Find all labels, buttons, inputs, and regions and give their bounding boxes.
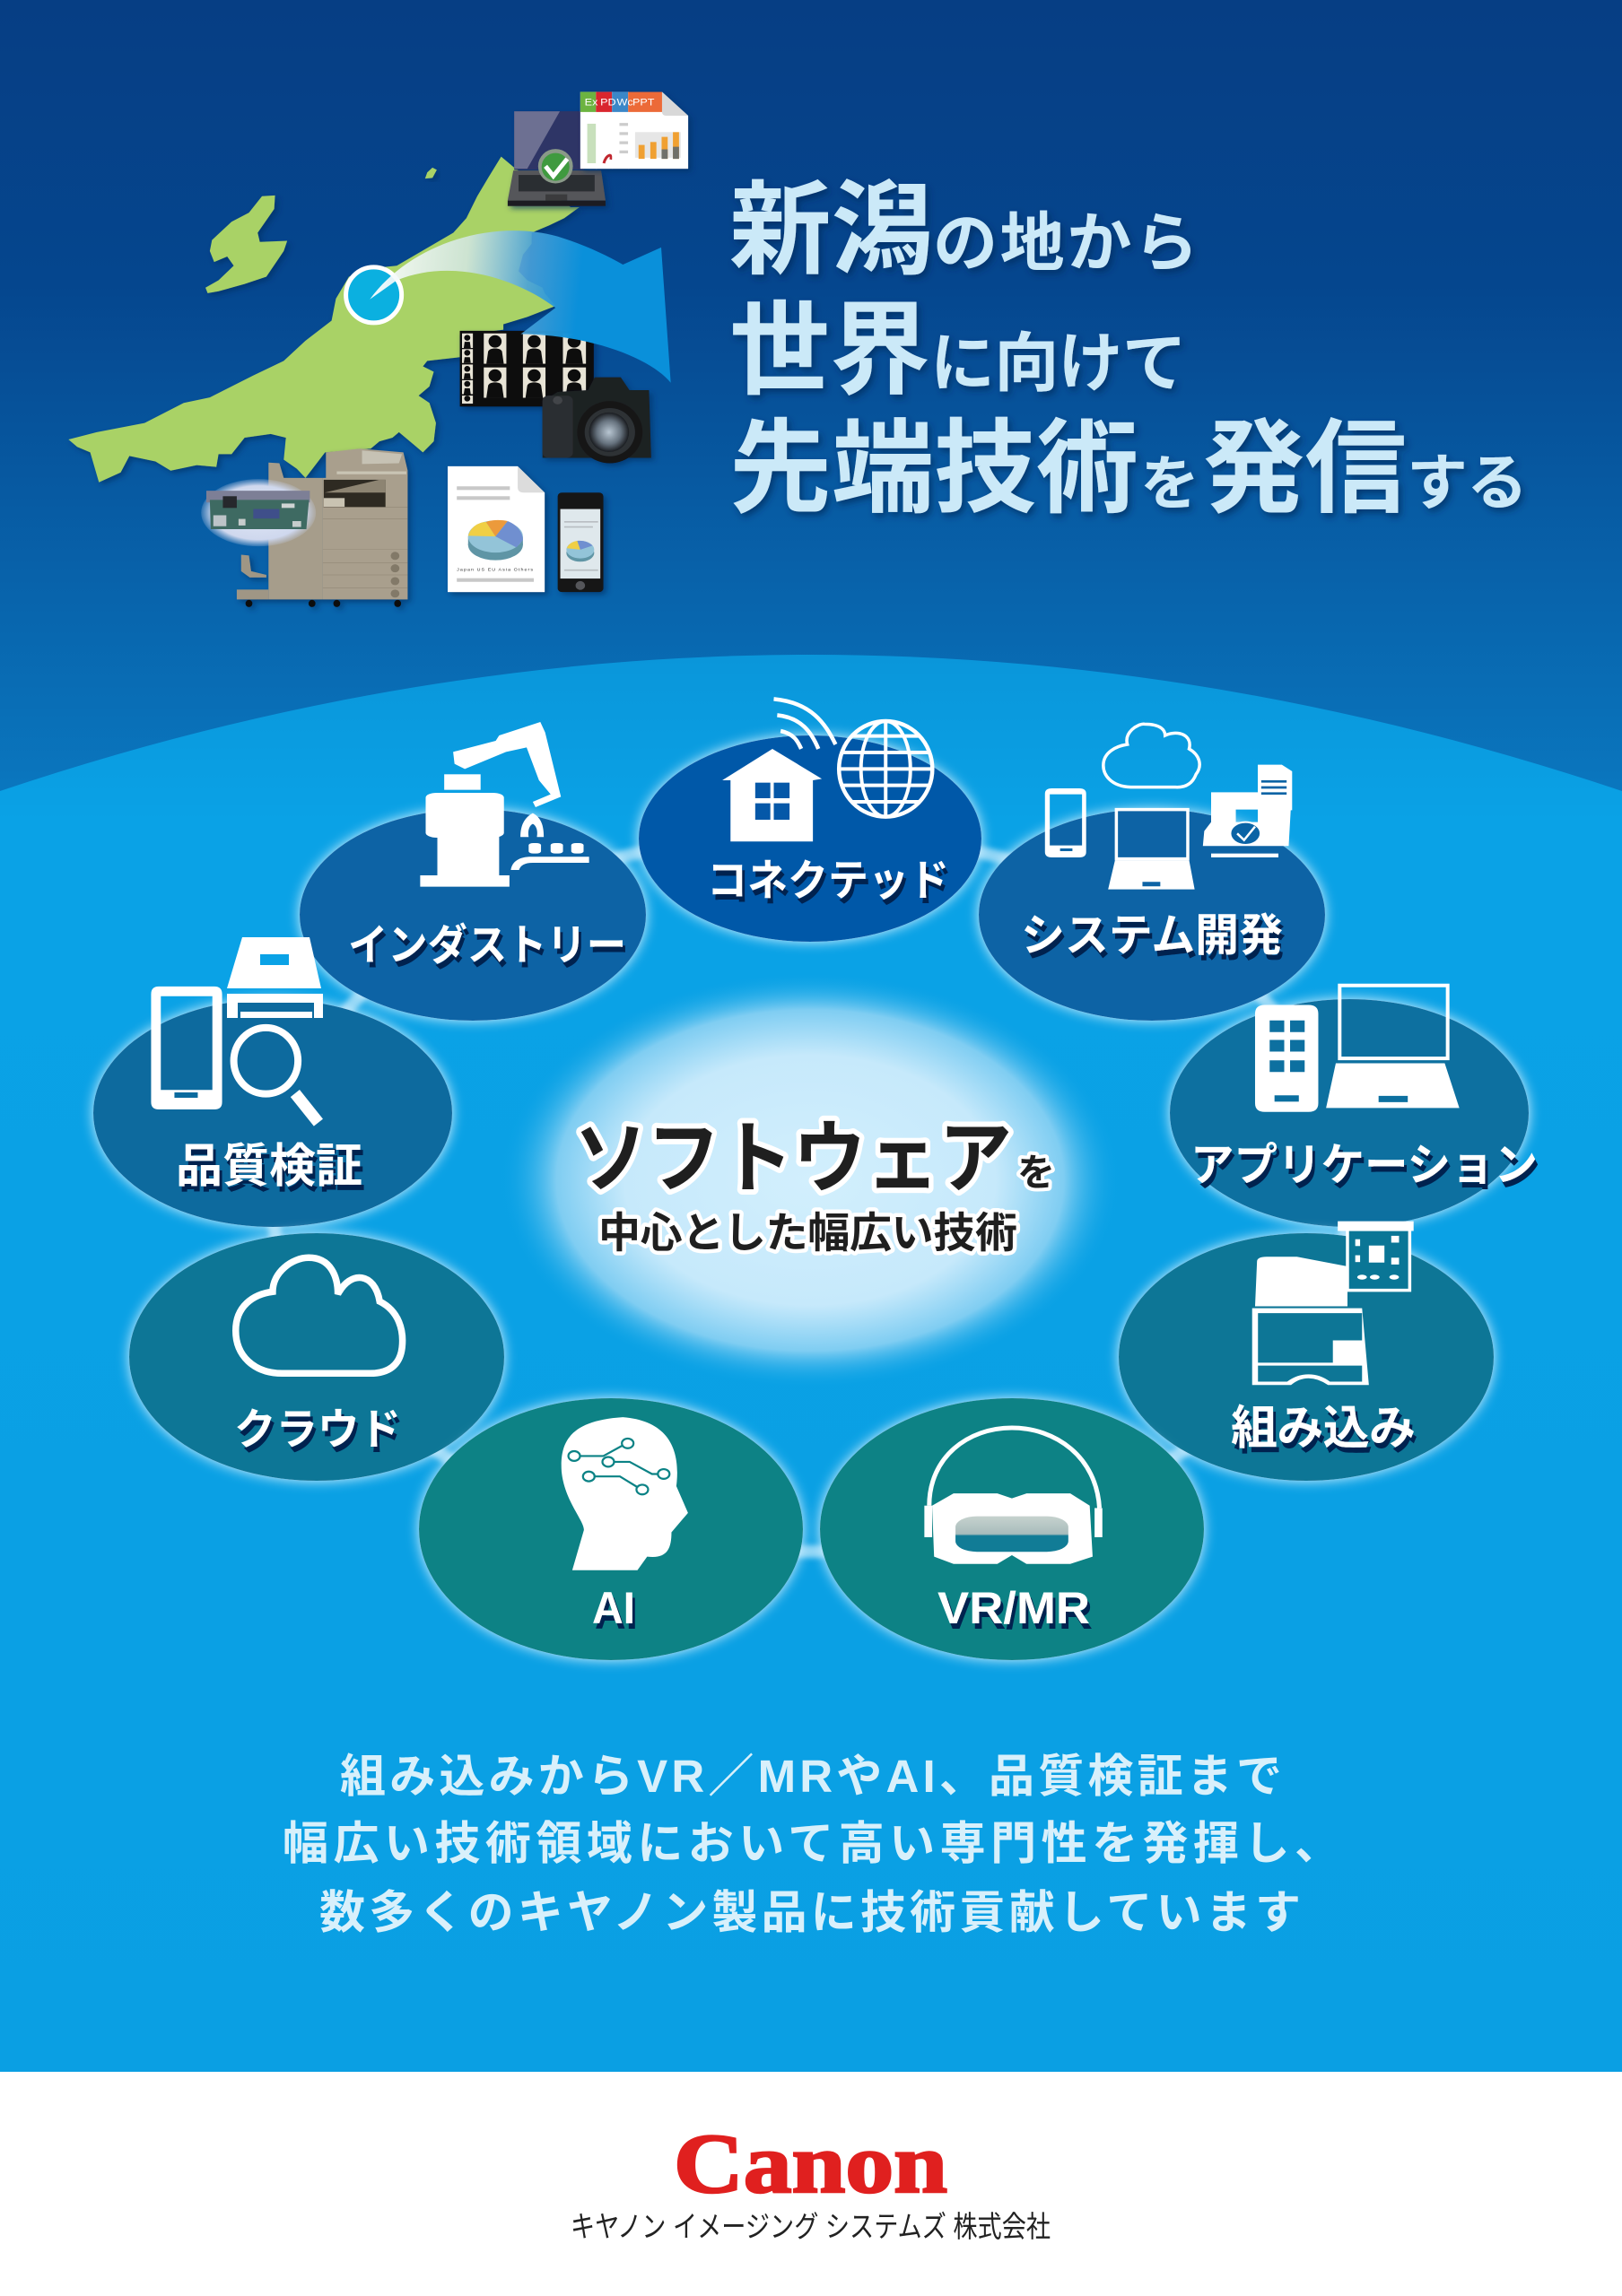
camera [543,378,651,464]
panel: コネクテッド [639,699,981,942]
report document with pie chart [448,466,545,592]
office document stack: PD [600,97,616,108]
ellipse [820,1398,1204,1660]
panel: アプリケーション [1170,986,1538,1227]
body text: 幅広い技術領域において高い専門性を発揮し、 [283,1818,1340,1869]
icon: head with circuits [562,1417,688,1570]
map: Sado island [205,196,287,293]
ellipse [419,1398,803,1660]
center heading: 中心とした幅広い技術 [598,1209,1017,1257]
label: クラウド [234,1406,401,1454]
panel: クラウド [129,1233,504,1481]
panel: インダストリー [300,722,646,1021]
ellipse [300,809,646,1021]
body text [283,1751,1340,1938]
check badge [538,149,573,183]
panel: AI [419,1398,803,1660]
label: コネクテッド [707,857,949,905]
footer panel [0,2072,1622,2296]
location pin circle [346,267,402,323]
label: VR/MR [937,1583,1090,1633]
arrow: from Niigata to the world [370,230,671,383]
title [729,174,1528,526]
icon: printer [227,937,323,1018]
panel: 組み込み [1119,1222,1494,1481]
logo: Canon: Canon [674,2118,947,2211]
ellipse [639,735,981,942]
title: 先端技術 [729,413,1138,526]
center heading: ソフトウェア [574,1114,1012,1203]
label: AI [592,1583,635,1633]
panel: VR/MR [820,1398,1204,1660]
ellipse [1170,999,1529,1227]
icon: tablet and laptop [1255,986,1460,1112]
connecting ring [272,834,1348,1552]
icon: cloud [236,1257,403,1373]
report document with pie chart: Japan US EU Asia Others [457,568,534,572]
title: する [1407,449,1528,517]
background: dark blue header [0,0,1622,807]
center heading [574,1114,1055,1257]
title: を [1140,450,1199,517]
icon: phone and magnifier [151,987,318,1123]
label: アプリケーション [1190,1140,1538,1190]
label: 組み込み [1231,1403,1416,1455]
background: light blue arc panel [0,655,1622,2072]
multifunction printer [237,448,407,607]
ellipse [93,999,452,1227]
center glow [501,972,1120,1388]
title: 世界 [729,294,930,408]
icon: VR headset [924,1428,1103,1564]
smartphone with pie chart [558,492,604,592]
office document stack: Ex [585,97,598,108]
label: 品質検証 [176,1141,362,1193]
panel: 品質検証 [93,937,452,1227]
map: Niigata mainland [68,157,580,483]
label: インダストリー [348,922,626,970]
laptop with check badge [508,111,606,206]
body text: 組み込みからVR／MRやAI、品質検証まで [340,1751,1282,1802]
circuit board callout [201,479,316,546]
title: 新潟 [729,174,933,288]
label: システム開発 [1021,910,1283,961]
illustration: Niigata map with products [68,91,688,607]
title: に向けて [930,328,1187,400]
ellipse [129,1233,504,1481]
title: 発信 [1203,413,1407,526]
photo contact sheet [460,331,594,406]
office document stack: Wc [617,97,633,108]
office document stack: PPT [632,97,654,108]
ellipse [979,809,1325,1021]
icon: printer with embedded board [1252,1222,1414,1385]
title: の地から [933,208,1199,280]
icon: connected house and globe [722,699,932,841]
company name: キヤノン イメージング システムズ 株式会社 [571,2210,1051,2243]
panel: システム開発 [979,724,1325,1021]
map: Awashima island [425,168,437,178]
ellipse [1119,1233,1494,1481]
body text: 数多くのキヤノン製品に技術貢献しています [319,1887,1301,1938]
icon: cloud, devices and printer [1045,724,1292,890]
center heading: を [1017,1152,1055,1194]
office document stack [580,91,688,169]
icon: robot arm [420,722,589,887]
